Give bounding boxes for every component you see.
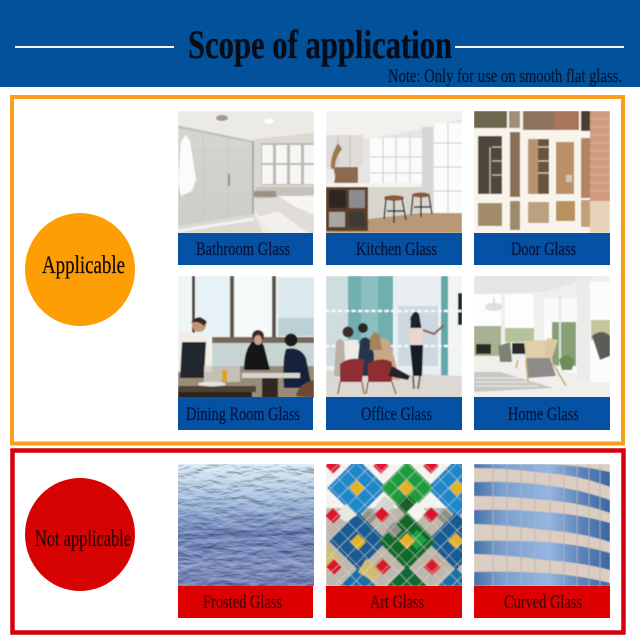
label: Kitchen Glass — [356, 239, 437, 260]
label bar — [326, 233, 462, 265]
label bar — [474, 233, 610, 265]
badge: not applicable — [25, 478, 135, 591]
label bar — [326, 397, 462, 430]
card: frosted glass — [178, 464, 314, 618]
photo: home — [474, 276, 610, 398]
panel: not applicable frame — [12, 450, 624, 632]
label: Dining Room Glass — [186, 404, 300, 425]
label: Door Glass — [511, 239, 576, 260]
photo: curved glass — [474, 464, 610, 586]
card: door glass — [474, 111, 610, 265]
label bar — [326, 586, 462, 618]
photo: frosted glass — [178, 464, 314, 586]
photo: art glass — [326, 464, 462, 586]
photo: door — [474, 111, 610, 233]
label: Curved Glass — [504, 592, 582, 613]
badge: applicable — [25, 213, 135, 326]
header line left — [15, 46, 174, 48]
label bar — [474, 397, 610, 430]
photo: bathroom — [178, 111, 314, 233]
label: Art Glass — [370, 592, 424, 613]
label: Home Glass — [508, 404, 579, 425]
photo: kitchen — [326, 111, 462, 233]
label: Frosted Glass — [203, 592, 282, 613]
header line right — [455, 46, 624, 48]
card: dining room glass — [178, 276, 314, 430]
label bar — [178, 397, 313, 430]
card: home glass — [474, 276, 610, 430]
card: bathroom glass — [178, 111, 314, 265]
panel: applicable frame — [12, 97, 623, 444]
card: art glass — [326, 464, 462, 618]
photo: office — [326, 276, 462, 398]
label: Bathroom Glass — [196, 239, 290, 260]
label bar — [474, 586, 610, 618]
header banner — [0, 0, 640, 87]
label bar — [178, 586, 313, 618]
label bar — [178, 233, 313, 265]
title: Scope of application — [188, 22, 452, 67]
label: Office Glass — [361, 404, 432, 425]
card: office glass — [326, 276, 462, 430]
card: kitchen glass — [326, 111, 462, 265]
badge: not applicable: Not applicable — [35, 526, 131, 551]
card: curved glass — [474, 464, 610, 618]
badge: applicable: Applicable — [42, 252, 125, 279]
photo: dining room — [178, 276, 314, 398]
